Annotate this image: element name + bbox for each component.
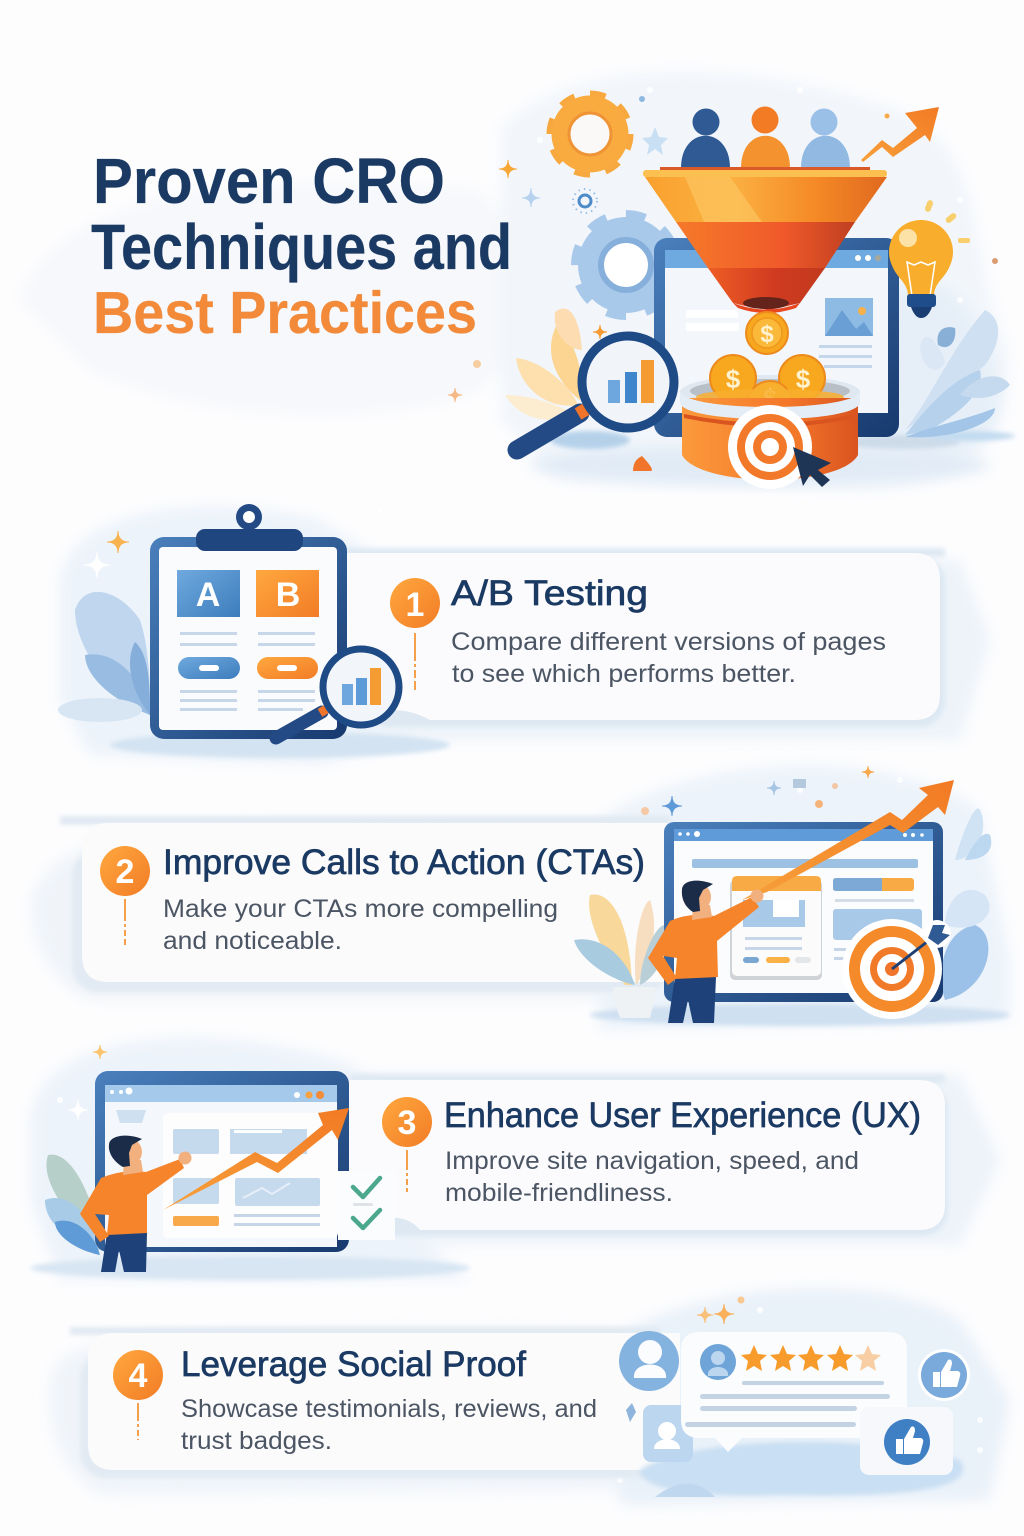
heading: Leverage Social Proof: Leverage Social Proof bbox=[181, 1345, 526, 1384]
card bbox=[60, 816, 670, 992]
panel: 4 Leverage Social Proof bbox=[70, 1296, 970, 1497]
number badge 2: 2 bbox=[116, 853, 134, 891]
icon: orange gear bbox=[552, 96, 628, 172]
review speech bubble bbox=[681, 1332, 907, 1452]
heading: A/B Testing: A/B Testing bbox=[451, 574, 648, 613]
body text bbox=[181, 1395, 597, 1455]
icon: blue gear bbox=[577, 216, 675, 314]
illustration: man pointing at landing page bbox=[574, 766, 1010, 1026]
plant bbox=[574, 894, 666, 1018]
small avatar bbox=[700, 1344, 736, 1380]
falling coin: $ bbox=[760, 321, 774, 348]
orange plant bbox=[505, 308, 582, 420]
number badge 4: 4 bbox=[129, 1357, 148, 1395]
magnifier bbox=[276, 649, 399, 738]
title: Proven CRO bbox=[93, 145, 445, 217]
checklist bbox=[338, 1171, 395, 1240]
body text: to see which performs better. bbox=[452, 660, 796, 688]
coin pile: $ bbox=[763, 385, 777, 412]
panel: 1 A/B Testing bbox=[58, 504, 945, 758]
orange bucket bbox=[680, 392, 860, 489]
browser window bbox=[664, 822, 943, 1002]
five star rating bbox=[741, 1345, 881, 1371]
sparkles bbox=[448, 96, 998, 471]
A/B variants bbox=[177, 570, 319, 711]
body text bbox=[445, 1147, 859, 1207]
growth arrow bbox=[861, 107, 939, 162]
card bbox=[70, 1327, 680, 1478]
right plant bbox=[941, 808, 991, 1000]
panel: 2 Improve Calls to Action bbox=[60, 766, 1010, 1026]
clip bbox=[196, 504, 303, 551]
body text bbox=[451, 628, 886, 688]
body text: mobile-friendliness. bbox=[445, 1179, 673, 1207]
number badge 1: 1 bbox=[406, 586, 424, 624]
coin pile: $ bbox=[726, 364, 741, 394]
illustration: clipboard A/B test bbox=[58, 504, 450, 758]
hero illustration: conversion funnel bbox=[448, 96, 1015, 489]
avatar card bbox=[643, 1405, 693, 1462]
lower thumbs up bbox=[860, 1407, 953, 1475]
blue plant bbox=[58, 592, 150, 722]
man bbox=[80, 1136, 192, 1272]
number badge 3: 3 bbox=[398, 1104, 416, 1142]
number badge 2 bbox=[100, 846, 150, 945]
growth arrow bbox=[163, 1108, 349, 1210]
target with dart bbox=[842, 919, 951, 1019]
number badge 3 bbox=[382, 1097, 432, 1192]
blue plant bbox=[905, 310, 1010, 437]
body text: and noticeable. bbox=[163, 927, 342, 955]
A/B variants: A bbox=[196, 576, 220, 614]
falling coin bbox=[746, 312, 788, 354]
number badge 4 bbox=[113, 1350, 163, 1440]
illustration: reviews and thumbs up bbox=[619, 1296, 970, 1497]
coin pile: $ bbox=[796, 364, 811, 394]
avatar circle bbox=[619, 1331, 679, 1391]
funnel bbox=[643, 167, 887, 313]
heading: Enhance User Experience: Enhance User Experience (UX) bbox=[444, 1096, 921, 1135]
body text: Improve site navigation, speed, and bbox=[445, 1147, 859, 1175]
number badge 1 bbox=[390, 578, 440, 690]
plant bbox=[45, 1155, 100, 1255]
sparkles bbox=[68, 1045, 107, 1120]
lightbulb bbox=[889, 199, 970, 318]
illustration: man with UX dashboard bbox=[30, 1045, 470, 1280]
title: Techniques and bbox=[91, 211, 512, 283]
body text: Showcase testimonials, reviews, and bbox=[181, 1395, 597, 1423]
review lines bbox=[685, 1381, 890, 1427]
body text: trust badges. bbox=[181, 1427, 332, 1455]
panel: 3 Enhance User Experience bbox=[30, 1045, 948, 1280]
orange bucket back rim bbox=[680, 375, 860, 409]
title: Best Practices bbox=[93, 280, 477, 346]
wash bbox=[640, 1442, 963, 1497]
body text: Make your CTAs more compelling bbox=[163, 895, 558, 923]
ground shadows bbox=[530, 431, 1015, 485]
heading: Improve Calls to Action: Improve Calls to Action (CTAs) bbox=[163, 843, 645, 882]
browser window bbox=[654, 238, 899, 437]
body text: Compare different versions of pages bbox=[451, 628, 886, 656]
body text bbox=[163, 895, 558, 955]
man bbox=[648, 881, 764, 1023]
card bbox=[345, 1074, 948, 1236]
cursor bbox=[793, 447, 831, 487]
right thumbs up bbox=[918, 1349, 970, 1401]
browser window bbox=[95, 1071, 349, 1252]
coin pile bbox=[696, 355, 844, 425]
sparkles bbox=[626, 1296, 744, 1422]
magnifier with chart bbox=[517, 336, 674, 450]
people icons bbox=[681, 106, 850, 168]
card bbox=[345, 548, 945, 727]
growth arrow bbox=[742, 780, 954, 900]
title bbox=[91, 145, 512, 346]
A/B variants: B bbox=[276, 576, 300, 614]
sparkles bbox=[641, 766, 874, 816]
